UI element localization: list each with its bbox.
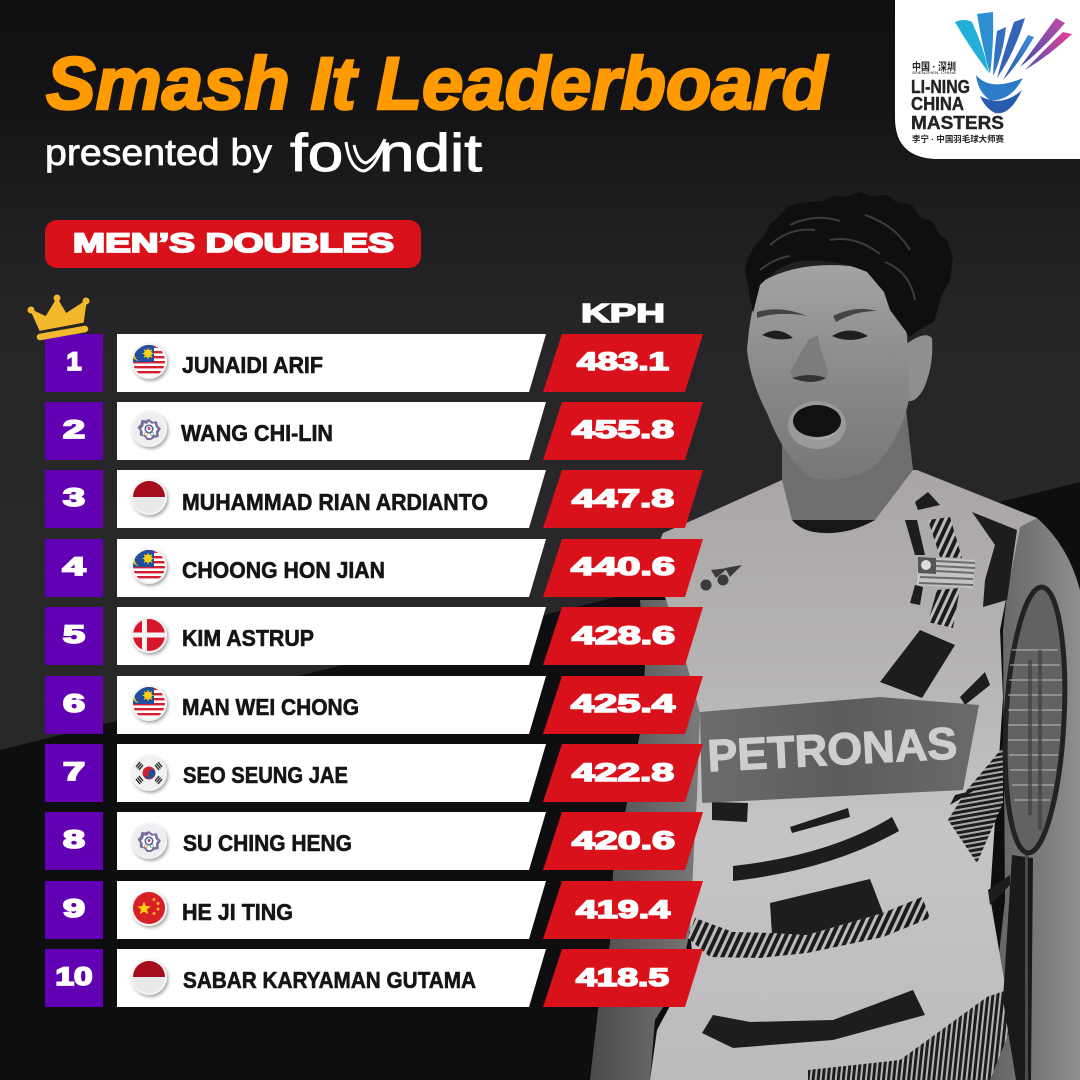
name bar: Kim Astrup: KIM ASTRUP bbox=[182, 625, 314, 651]
sponsor logo: foundit: foundit bbox=[290, 124, 482, 183]
rank 5: 5 bbox=[63, 621, 85, 649]
row 5 bbox=[45, 607, 703, 665]
logo text: SHENZHEN, CHINA bbox=[912, 71, 957, 75]
rank 9: 9 bbox=[63, 895, 85, 923]
speed 420.6 bbox=[543, 812, 703, 870]
speed 425.4 bbox=[543, 676, 703, 734]
category pill: MEN’S DOUBLES bbox=[73, 228, 394, 258]
speed 455.8: 455.8 bbox=[572, 416, 674, 444]
name bar: Muhammad Rian Ardianto: MUHAMMAD RIAN ARDIANTO bbox=[182, 489, 488, 515]
logo text: CHINA bbox=[911, 94, 964, 114]
rank 5 bbox=[45, 607, 103, 665]
rank 4 bbox=[45, 539, 103, 597]
sponsor band: PETRONAS bbox=[706, 717, 958, 781]
sponsor logo on jersey bbox=[700, 565, 742, 590]
player photo bbox=[590, 192, 1080, 1080]
facial features bbox=[757, 309, 877, 449]
speed 428.6: 428.6 bbox=[572, 622, 675, 650]
name bar: Su Ching Heng bbox=[117, 812, 546, 870]
name bar: Su Ching Heng: SU CHING HENG bbox=[183, 830, 352, 856]
speed 483.1: 483.1 bbox=[577, 348, 669, 376]
category pill bbox=[45, 220, 421, 268]
speed 418.5 bbox=[543, 949, 703, 1007]
rank 8: 8 bbox=[63, 826, 85, 854]
neck bbox=[782, 400, 913, 520]
flag patch bbox=[917, 557, 975, 588]
subtitle: presented by: presented by bbox=[45, 132, 273, 173]
name bar: He Ji Ting bbox=[117, 881, 546, 939]
speed 419.4: 419.4 bbox=[576, 896, 670, 924]
speed 440.6: 440.6 bbox=[571, 553, 675, 581]
column heading: KPH: KPH bbox=[581, 298, 665, 328]
logo panel bbox=[895, 0, 1080, 159]
name bar: Sabar Karyaman Gutama bbox=[117, 949, 546, 1007]
logo text: MASTERS bbox=[911, 113, 1004, 133]
rank 6 bbox=[45, 676, 103, 734]
row 7 bbox=[45, 744, 703, 802]
name bar: Seo Seung Jae: SEO SEUNG JAE bbox=[183, 762, 348, 788]
name bar: Seo Seung Jae bbox=[117, 744, 546, 802]
logo text bbox=[911, 60, 1004, 144]
rank 3: 3 bbox=[63, 484, 85, 512]
title: Smash It Leaderboard bbox=[46, 42, 829, 125]
name bar: He Ji Ting: HE JI TING bbox=[182, 899, 293, 925]
ear bbox=[905, 335, 932, 401]
rank 2 bbox=[45, 402, 103, 460]
row 6 bbox=[45, 676, 703, 734]
row 3 bbox=[45, 470, 703, 528]
speed 419.4 bbox=[543, 881, 703, 939]
rank 10: 10 bbox=[56, 963, 92, 991]
speed 440.6 bbox=[543, 539, 703, 597]
logo text: 中国 · 深圳 bbox=[912, 60, 956, 73]
rank 8 bbox=[45, 812, 103, 870]
face bbox=[747, 265, 910, 480]
name bar: Sabar Karyaman Gutama: SABAR KARYAMAN GUTAMA bbox=[183, 967, 476, 993]
racket bbox=[998, 585, 1072, 1080]
rank 9 bbox=[45, 881, 103, 939]
shuttlecock icon bbox=[955, 12, 1072, 113]
name bar: Wang Chi-Lin bbox=[117, 402, 546, 460]
row 9 bbox=[45, 881, 703, 939]
name bar: Muhammad Rian Ardianto bbox=[117, 470, 546, 528]
row 8 bbox=[45, 812, 703, 870]
speed 428.6 bbox=[543, 607, 703, 665]
speed 425.4: 425.4 bbox=[571, 690, 675, 718]
hair bbox=[745, 192, 953, 337]
name bar: Man Wei Chong bbox=[117, 676, 546, 734]
logo text: 李宁 · 中国羽毛球大师赛 bbox=[912, 134, 1004, 144]
speed 455.8 bbox=[543, 402, 703, 460]
rank 10 bbox=[45, 949, 103, 1007]
name bar: Choong Hon Jian: CHOONG HON JIAN bbox=[182, 557, 385, 583]
speed 422.8: 422.8 bbox=[572, 759, 674, 787]
name bar: Junaidi Arif: JUNAIDI ARIF bbox=[182, 352, 323, 378]
rank 1: 1 bbox=[66, 348, 82, 376]
left arm bbox=[590, 600, 700, 1080]
name bar: Junaidi Arif bbox=[117, 334, 546, 392]
name bar: Kim Astrup bbox=[117, 607, 546, 665]
torso and jersey bbox=[650, 470, 1037, 1080]
rank 7 bbox=[45, 744, 103, 802]
speed 447.8 bbox=[543, 470, 703, 528]
row 4 bbox=[45, 539, 703, 597]
speed 422.8 bbox=[543, 744, 703, 802]
icon: crown bbox=[28, 294, 90, 337]
rank 7: 7 bbox=[63, 758, 85, 786]
right arm bbox=[985, 518, 1080, 1080]
speed 483.1 bbox=[543, 334, 703, 392]
row 2 bbox=[45, 402, 703, 460]
row 1 bbox=[45, 334, 703, 392]
speed 418.5: 418.5 bbox=[576, 964, 669, 992]
row 10 bbox=[45, 949, 703, 1007]
collar bbox=[792, 520, 875, 533]
rank 3 bbox=[45, 470, 103, 528]
name bar: Man Wei Chong: MAN WEI CHONG bbox=[182, 694, 359, 720]
rank 6: 6 bbox=[63, 690, 85, 718]
jersey graphics bbox=[688, 492, 1017, 1080]
rank 4: 4 bbox=[62, 553, 86, 581]
logo text: LI-NING bbox=[911, 77, 970, 97]
rank 1 bbox=[45, 334, 103, 392]
rank 2: 2 bbox=[63, 416, 85, 444]
speed 447.8: 447.8 bbox=[572, 485, 674, 513]
sponsor band bbox=[700, 697, 979, 803]
name bar: Wang Chi-Lin: WANG CHI-LIN bbox=[181, 420, 333, 446]
name bar: Choong Hon Jian bbox=[117, 539, 546, 597]
speed 420.6: 420.6 bbox=[572, 827, 675, 855]
